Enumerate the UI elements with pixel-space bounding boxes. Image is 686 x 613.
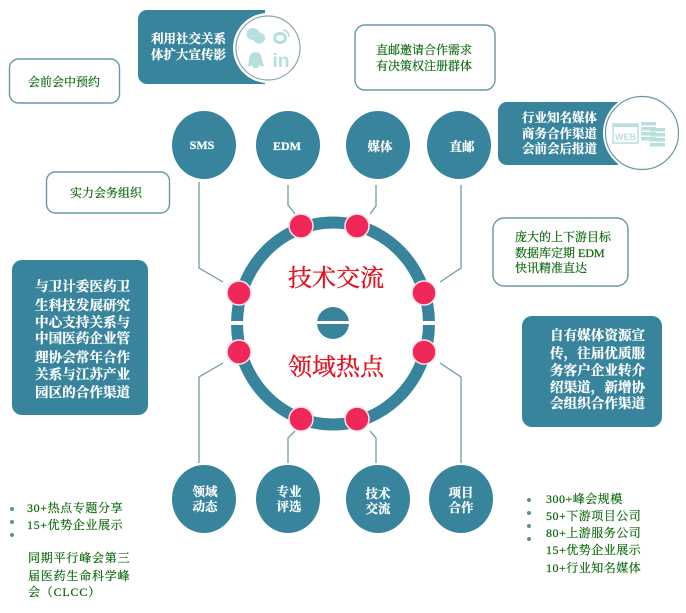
callout: database: 庞大的上下游目标 xyxy=(515,229,612,244)
node: expert selection xyxy=(256,465,320,533)
node: field trends xyxy=(172,465,236,533)
callout: database: 快讯精准直达 xyxy=(515,260,587,275)
icon: qq xyxy=(248,52,264,68)
node: field trends: 动态 xyxy=(192,499,219,514)
panel: partners left: 理协会常年合作 xyxy=(35,349,131,365)
node: expert selection: 专业 xyxy=(276,484,302,499)
node: project cooperation xyxy=(429,465,493,533)
list: forum highlights: 30+热点专题分享 xyxy=(27,500,123,515)
callout: conference organisation xyxy=(46,172,170,213)
callout: direct mail invitation xyxy=(355,25,495,90)
panel: partners left: 园区的合作渠道 xyxy=(35,384,131,400)
panel: industry media: 会前会后报道 xyxy=(522,141,598,156)
panel: social media: 利用社交关系 xyxy=(151,31,227,46)
callout: database xyxy=(493,218,628,286)
connector lines xyxy=(199,182,461,463)
heading: technology exchange: 技术交流 xyxy=(288,265,384,292)
node: direct mail: 直邮 xyxy=(449,139,475,154)
panel: own media xyxy=(522,316,662,427)
list: summit scale: 300+峰会规模 xyxy=(546,491,623,506)
panel: partners left: 与卫计委医药卫 xyxy=(35,278,131,294)
node: tech exchange: 技术 xyxy=(365,486,391,501)
list: summit scale: 15+优势企业展示 xyxy=(546,542,642,557)
list: forum highlights: 届医药生命科学峰 xyxy=(28,568,130,583)
node: tech exchange: 交流 xyxy=(365,501,391,516)
list: forum highlights: 同期平行峰会第三 xyxy=(28,550,130,565)
heading: field hotspots: 领域热点 xyxy=(288,354,385,381)
red ring dots xyxy=(227,214,436,431)
node: EDM xyxy=(256,111,320,179)
panel: own media: 绍渠道，新增协 xyxy=(550,379,647,396)
list: summit scale: 80+上游服务公司 xyxy=(546,525,641,540)
node: project cooperation: 项目 xyxy=(448,485,474,500)
panel: social media: 体扩大宣传影 xyxy=(151,47,227,62)
panel: industry media xyxy=(498,94,681,172)
panel: partners left: 中国医药企业管 xyxy=(35,330,131,346)
list: summit scale: 50+下游项目公司 xyxy=(546,509,641,523)
node: media: 媒体 xyxy=(367,139,393,154)
icon: wechat xyxy=(246,28,265,44)
panel: partners left: 关系与江苏产业 xyxy=(35,366,131,382)
callout: pre-meeting booking xyxy=(10,59,120,103)
panel: own media: 务客户企业转介 xyxy=(550,362,646,378)
node: project cooperation: 合作 xyxy=(448,500,474,515)
panel: social media xyxy=(138,10,303,84)
icon: web window: WEB xyxy=(615,132,636,142)
icon: weibo xyxy=(274,30,289,42)
list: forum highlights: 会（CLCC） xyxy=(28,585,101,599)
node: expert selection: 评选 xyxy=(276,499,302,514)
list: forum highlights: 15+优势企业展示 xyxy=(27,517,124,532)
panel: own media: 自有媒体资源宣 xyxy=(550,327,646,343)
callout: pre-meeting booking: 会前会中预约 xyxy=(28,74,100,89)
list: summit scale xyxy=(527,491,642,575)
list: summit scale: 10+行业知名媒体 xyxy=(546,560,641,575)
callout: direct mail invitation: 有决策权注册群体 xyxy=(376,58,472,73)
icon: linkedin: in xyxy=(273,51,289,72)
center divided circle xyxy=(316,307,350,339)
node: media xyxy=(346,111,410,179)
node: SMS xyxy=(172,111,236,179)
icon: web window xyxy=(613,124,638,143)
node: field trends: 领域 xyxy=(192,484,218,499)
node: SMS: SMS xyxy=(190,138,215,152)
icon: document stack xyxy=(641,122,665,146)
panel: partners left: 中心支持关系与 xyxy=(35,314,130,330)
list: forum highlights xyxy=(10,500,130,599)
panel: partners left xyxy=(12,260,148,415)
panel: own media: 会组织合作渠道 xyxy=(550,395,646,412)
panel: own media: 传，往届优质服 xyxy=(550,345,646,362)
panel: partners left: 生科技发展研究 xyxy=(35,297,131,313)
panel: industry media: 商务合作渠道 xyxy=(522,126,598,141)
callout: database: 数据库定期 EDM xyxy=(515,245,605,260)
callout: direct mail invitation: 直邮邀请合作需求 xyxy=(376,42,472,57)
node: EDM: EDM xyxy=(273,139,301,153)
node: tech exchange xyxy=(346,465,410,533)
central ring xyxy=(226,214,440,431)
panel: industry media: 行业知名媒体 xyxy=(522,110,598,125)
callout: conference organisation: 实力会务组织 xyxy=(70,185,143,200)
node: direct mail xyxy=(427,111,491,179)
